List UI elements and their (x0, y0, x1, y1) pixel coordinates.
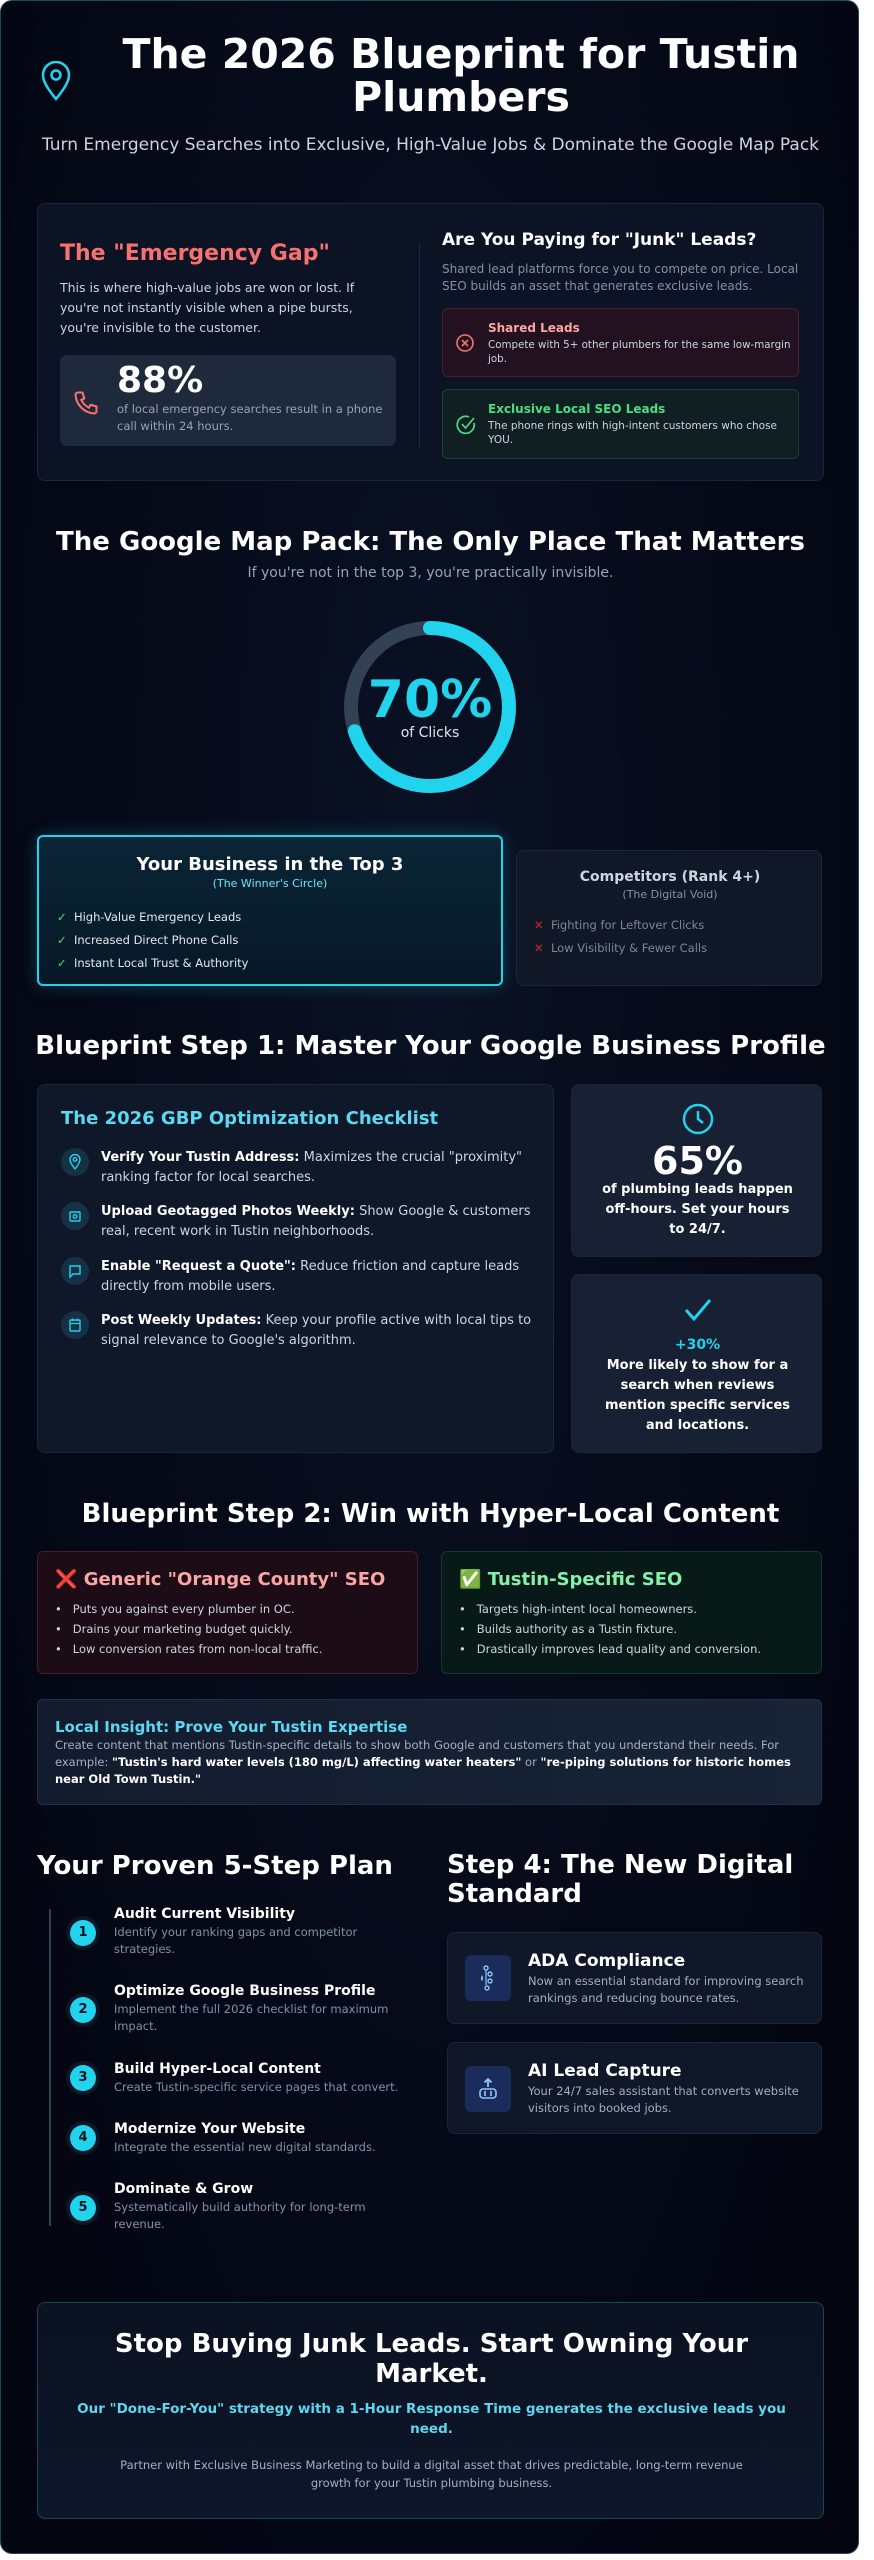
text: junk leads description: Shared lead platforms force you to compete on price. Local SEO builds an asset that generates exclusive leads. (442, 262, 798, 293)
panel: generic SEO: ❌ Generic "Orange County" SEO (55, 1569, 385, 1590)
timeline: 5 steps (49, 1906, 398, 2231)
subtitle: Turn Emergency Searches into Exclusive, High-Value Jobs & Dominate the Google Map Pack (42, 135, 819, 155)
step 1 (66, 1906, 358, 1956)
step 5: Dominate & Grow (114, 2181, 253, 2197)
card: ADA compliance: Now an essential standard for improving search rankings and reducing bounce rates. (528, 1974, 804, 2005)
step 2: 2 (78, 2002, 88, 2017)
panel: top 3: ✓ High-Value Emergency Leads (57, 910, 241, 924)
step 4: Modernize Your Website (114, 2121, 305, 2137)
heading: junk leads: Are You Paying for "Junk" Leads? (442, 230, 756, 250)
panel: generic SEO: • Puts you against every plumber in OC. (55, 1602, 295, 1616)
step 2: Implement the full 2026 checklist for maximum impact. (114, 2002, 388, 2033)
icon: map pin (42, 61, 70, 101)
callout: exclusive leads: The phone rings with high-intent customers who chose YOU. (488, 420, 777, 446)
card: ADA compliance: ADA Compliance (528, 1951, 685, 1971)
step 3: Build Hyper-Local Content (114, 2061, 321, 2077)
chart: 70% donut: of Clicks (401, 725, 459, 741)
panel: competitors: ✕ Low Visibility & Fewer Calls (534, 941, 707, 955)
step 5: Systematically build authority for long-term revenue. (114, 2200, 366, 2231)
callout: shared leads: Shared Leads (488, 321, 580, 335)
heading: map pack: The Google Map Pack: The Only Place That Matters (56, 527, 805, 557)
panel: competitors: Competitors (Rank 4+) (580, 869, 760, 885)
heading: step 1: Blueprint Step 1: Master Your Google Business Profile (35, 1031, 826, 1061)
panel: Tustin-specific SEO: • Targets high-intent local homeowners. (459, 1602, 697, 1616)
step 1: Identify your ranking gaps and competitor strategies. (114, 1925, 357, 1956)
panel: emergency gap and junk leads (37, 203, 824, 481)
panel: competitors: (The Digital Void) (622, 888, 718, 901)
checklist item: photos: Upload Geotagged Photos Weekly: Show Google & customers real, recent work in Tustin neighborhoods. (101, 1204, 531, 1239)
heading: emergency gap: The "Emergency Gap" (60, 241, 330, 266)
step 2 (66, 1983, 388, 2033)
stat: 88% (60, 355, 396, 446)
stat card: 65% (571, 1084, 822, 1257)
panel: Tustin-specific SEO (441, 1551, 822, 1674)
callout: exclusive leads: Exclusive Local SEO Leads (488, 402, 665, 416)
step 2: Optimize Google Business Profile (114, 1983, 375, 1999)
callout: shared leads: Compete with 5+ other plumbers for the same low-margin job. (488, 339, 791, 365)
panel: Tustin-specific SEO: ✅ Tustin-Specific SEO (459, 1569, 682, 1590)
card: AI lead capture (447, 2042, 822, 2134)
card: AI lead capture: AI Lead Capture (528, 2061, 682, 2081)
chart: 70% donut (344, 621, 516, 793)
heading: step 4 digital standard: Step 4: The New Digital Standard (447, 1850, 793, 1909)
panel: generic SEO: • Low conversion rates from non-local traffic. (55, 1642, 322, 1656)
panel: Tustin-specific SEO: • Builds authority as a Tustin fixture. (459, 1622, 677, 1636)
chart: 70% donut: 70% (368, 670, 492, 730)
callout: local insight: Local Insight: Prove Your Tustin Expertise (55, 1718, 407, 1736)
panel: Tustin-specific SEO: • Drastically improves lead quality and conversion. (459, 1642, 761, 1656)
heading: step 2: Blueprint Step 2: Win with Hyper-Local Content (82, 1499, 779, 1529)
callout: local insight (37, 1699, 822, 1805)
icon: phone (74, 392, 98, 414)
panel: generic SEO (37, 1551, 418, 1674)
checklist item: verify address: Verify Your Tustin Address: Maximizes the crucial "proximity" ranking factor for local searches. (101, 1150, 522, 1185)
stat card: +30%: mention specific services and locations. (605, 1398, 790, 1433)
title: The 2026 Blueprint for Tustin Plumbers (122, 30, 800, 121)
panel: call to action (37, 2302, 824, 2519)
subheading: map pack: If you're not in the top 3, you're practically invisible. (248, 565, 613, 581)
step 3: Create Tustin-specific service pages that convert. (114, 2080, 398, 2094)
panel: competitors (516, 850, 822, 986)
panel: top 3 (37, 835, 503, 986)
step 5: 5 (78, 2200, 88, 2215)
step 4: Integrate the essential new digital standards. (114, 2140, 376, 2154)
heading: 5-step plan: Your Proven 5-Step Plan (37, 1851, 393, 1881)
stat: 88%: of local emergency searches result in a phone call within 24 hours. (117, 402, 382, 433)
step 3 (66, 2061, 398, 2095)
step 4: 4 (78, 2130, 88, 2145)
step 1: Audit Current Visibility (114, 1906, 295, 1922)
callout: exclusive leads (442, 389, 799, 459)
stat: 88%: 88% (117, 360, 203, 401)
checklist item: weekly updates: Post Weekly Updates: Keep your profile active with local tips to signal relevance to Google's algorithm. (101, 1313, 531, 1348)
stat card: +30%: More likely to show for a search when reviews (607, 1358, 788, 1393)
stat card: +30% (571, 1274, 822, 1453)
step 1: 1 (78, 1925, 88, 1940)
panel: generic SEO: • Drains your marketing budget quickly. (55, 1622, 292, 1636)
stat card: +30%: +30% (675, 1337, 720, 1353)
panel: top 3: Your Business in the Top 3 (137, 854, 403, 875)
callout: shared leads (442, 308, 799, 377)
panel: competitors: ✕ Fighting for Leftover Clicks (534, 918, 704, 932)
panel: top 3: ✓ Instant Local Trust & Authority (57, 956, 248, 970)
step 3: 3 (78, 2070, 88, 2085)
CTA note: Partner with Exclusive Business Marketing to build a digital asset that drives predictable, long-term revenue growth for your Tustin plumbing business. (120, 2458, 743, 2490)
CTA highlight: Our "Done-For-You" strategy with a 1-Hour Response Time generates the exclusive leads you need. (77, 2401, 786, 2437)
stat card: 65%: of plumbing leads happen off-hours. Set your hours to 24/7. (602, 1182, 793, 1237)
stat card: 65%: 65% (652, 1139, 743, 1183)
text: emergency gap description: This is where high-value jobs are won or lost. If you're not instantly visible when a pipe bursts, you're invisible to the customer. (60, 280, 354, 335)
CTA heading: Stop Buying Junk Leads. Start Owning Your Market. (115, 2329, 748, 2389)
step 4 (66, 2121, 376, 2155)
card: AI lead capture: Your 24/7 sales assistant that converts website visitors into booked jobs. (528, 2084, 799, 2115)
step 5 (66, 2181, 366, 2231)
panel: GBP checklist: The 2026 GBP Optimization Checklist (61, 1108, 438, 1129)
checklist item: request quote: Enable "Request a Quote": Reduce friction and capture leads directly from mobile users. (101, 1259, 519, 1294)
panel: top 3: (The Winner's Circle) (213, 877, 327, 890)
callout: local insight: Create content that mentions Tustin-specific details to show both Google and customers that you understand their needs. For example: "Tustin's hard water levels (180 mg/L) affecting water heaters" or "re-piping solutions for historic homes near Old Town Tustin." (55, 1738, 791, 1786)
card: ADA compliance (447, 1932, 822, 2024)
panel: GBP checklist (37, 1084, 554, 1453)
panel: top 3: ✓ Increased Direct Phone Calls (57, 933, 238, 947)
